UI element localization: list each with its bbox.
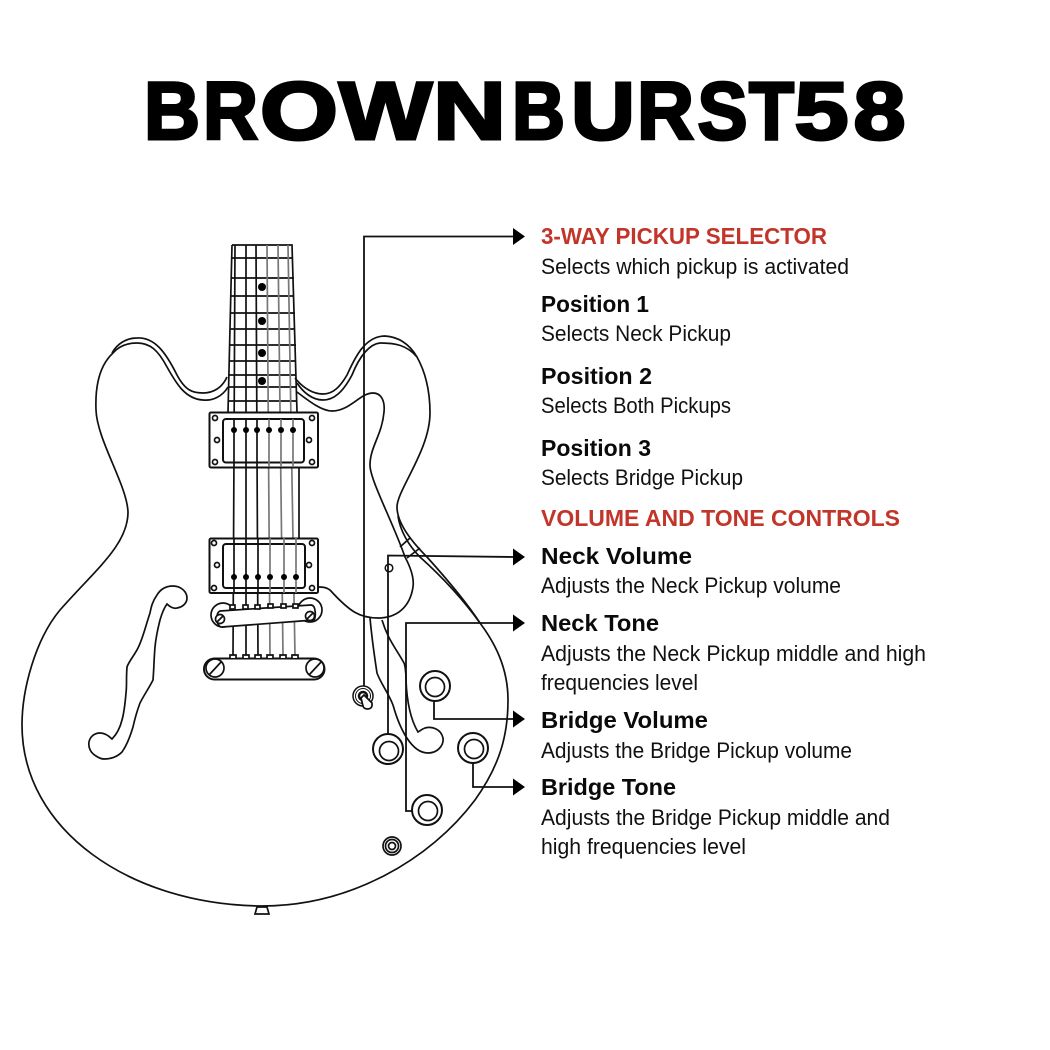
- arrow: pickup selector: [364, 228, 525, 686]
- text: neck tone description: frequencies level: [541, 670, 698, 695]
- label: bridge volume: Bridge Volume: [541, 707, 708, 733]
- title: S: [698, 66, 748, 157]
- title: B: [512, 66, 565, 157]
- title: O: [260, 66, 338, 157]
- tailpiece: [204, 655, 324, 680]
- label: position 1: Position 1: [541, 291, 649, 317]
- body outline: [22, 336, 508, 906]
- label: position 3: Position 3: [541, 435, 651, 461]
- title: R: [637, 66, 694, 157]
- label: neck volume: Neck Volume: [541, 543, 692, 569]
- pickguard: [297, 392, 420, 618]
- text: bridge volume description: Adjusts the Bridge Pickup volume: [541, 738, 852, 763]
- right f-hole: [370, 618, 443, 753]
- arrow: bridge volume: [434, 701, 525, 728]
- title: B: [144, 66, 200, 157]
- text: bridge tone description: Adjusts the Bridge Pickup middle and: [541, 805, 890, 830]
- knob: neck volume: [373, 734, 403, 764]
- text: bridge tone description: [541, 805, 890, 859]
- title: 5: [794, 66, 848, 157]
- heading: volume and tone controls: VOLUME AND TONE CONTROLS: [541, 505, 900, 531]
- title: R: [203, 66, 258, 157]
- heading: 3-way pickup selector: 3-WAY PICKUP SELECTOR: [541, 223, 827, 249]
- pickup selector switch: [353, 686, 373, 709]
- text: neck volume description: Adjusts the Neck Pickup volume: [541, 573, 841, 598]
- title: T: [749, 66, 794, 157]
- text: position 3 description: Selects Bridge Pickup: [541, 465, 743, 490]
- output jack: [383, 837, 401, 855]
- title: 8: [854, 66, 906, 157]
- left f-hole: [89, 586, 187, 759]
- text: selector description: Selects which pickup is activated: [541, 254, 849, 279]
- fret markers: [258, 283, 266, 385]
- label: position 2: Position 2: [541, 363, 652, 389]
- arrow: neck tone: [406, 614, 525, 811]
- knob: bridge volume: [420, 671, 450, 701]
- bridge: [211, 598, 322, 627]
- arrow: neck volume: [385, 548, 525, 734]
- arrow: bridge tone: [473, 763, 525, 796]
- text: position 2 description: Selects Both Pickups: [541, 393, 731, 418]
- bridge pickup: [210, 538, 318, 593]
- label: bridge tone: Bridge Tone: [541, 774, 676, 800]
- text: position 1 description: Selects Neck Pickup: [541, 321, 731, 346]
- title: U: [571, 66, 635, 157]
- text: neck tone description: Adjusts the Neck Pickup middle and high: [541, 641, 926, 666]
- text: bridge tone description: high frequencies level: [541, 834, 746, 859]
- title: N: [433, 66, 506, 157]
- end pin: [255, 907, 269, 914]
- fretboard and frets: [228, 245, 299, 538]
- title: W: [339, 66, 433, 157]
- guitar illustration: [22, 245, 508, 914]
- knob: neck tone: [412, 795, 442, 825]
- strings: [233, 245, 295, 656]
- label: neck tone: Neck Tone: [541, 610, 659, 636]
- text: neck tone description: [541, 641, 926, 695]
- knob: bridge tone: [458, 733, 488, 763]
- neck pickup: [210, 412, 318, 468]
